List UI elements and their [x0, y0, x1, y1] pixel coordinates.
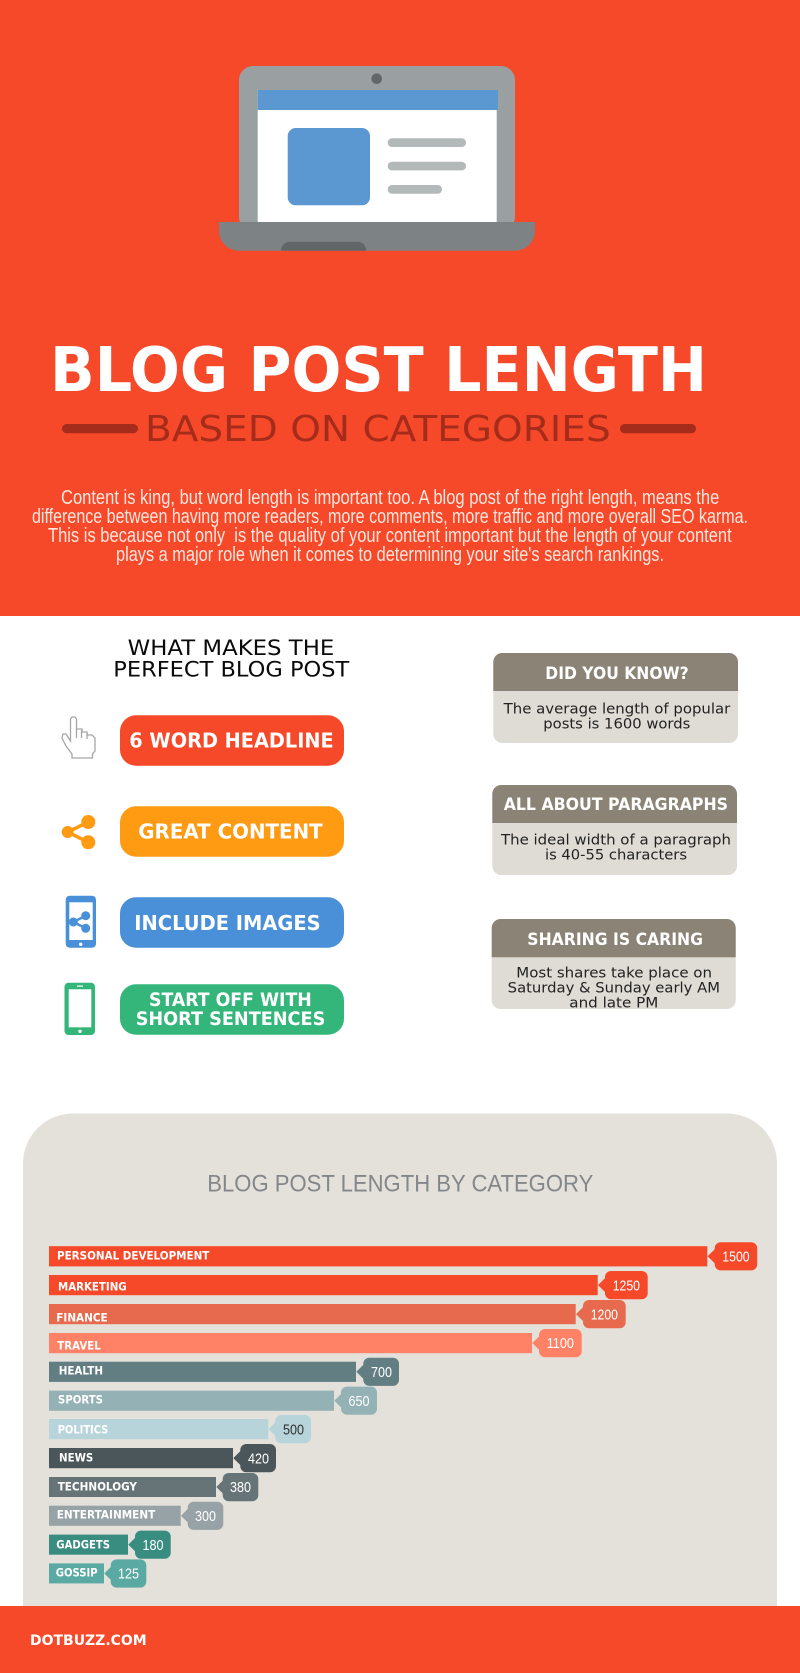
card: all about paragraphs: The ideal width of a paragraph	[500, 831, 731, 848]
intro paragraph	[32, 487, 748, 566]
bar: gadgets 180: GADGETS	[56, 1538, 110, 1552]
bar: personal development 1500: PERSONAL DEVELOPMENT	[57, 1249, 209, 1263]
button: include images: INCLUDE IMAGES	[134, 911, 321, 935]
panel: header background	[0, 0, 800, 616]
icon: laptop	[219, 66, 535, 251]
card: all about paragraphs: is 40-55 characters	[545, 846, 687, 863]
button: start off with short sentences: SHORT SENTENCES	[136, 1009, 325, 1030]
button: great content: GREAT CONTENT	[138, 820, 323, 844]
bar: politics 500: POLITICS	[58, 1422, 108, 1436]
card: sharing is caring: Most shares take place on	[516, 964, 712, 981]
button: great content	[120, 806, 344, 857]
bar: travel 1100	[49, 1329, 582, 1357]
bar: gossip 125: 125	[118, 1566, 139, 1583]
bar: personal development 1500	[49, 1242, 757, 1270]
bar: news 420: 420	[248, 1450, 269, 1467]
bar: gossip 125: GOSSIP	[56, 1566, 98, 1580]
bar: sports 650	[49, 1387, 377, 1415]
bar: entertainment 300: 300	[195, 1508, 216, 1525]
card: all about paragraphs: ALL ABOUT PARAGRAPHS	[504, 795, 728, 815]
chart title: BLOG POST LENGTH BY CATEGORY	[207, 1170, 593, 1197]
button: start off with short sentences: START OFF WITH	[149, 990, 312, 1011]
bar: marketing 1250: MARKETING	[58, 1279, 127, 1293]
bar: marketing 1250	[49, 1271, 648, 1299]
icon: phone with share	[66, 896, 96, 948]
card: sharing is caring: Saturday & Sunday early AM	[508, 979, 720, 996]
panel: chart background	[23, 1114, 777, 1606]
bar: sports 650: SPORTS	[58, 1392, 103, 1406]
bar: health 700: 700	[371, 1364, 392, 1381]
bar: news 420: NEWS	[59, 1450, 93, 1464]
card: sharing is caring: SHARING IS CARING	[527, 930, 703, 950]
panel: footer	[0, 1606, 800, 1673]
icon: share	[62, 815, 95, 849]
title: BLOG POST LENGTH	[50, 334, 707, 406]
button: 6 word headline	[120, 715, 344, 766]
bar: finance 1200	[49, 1300, 626, 1328]
heading: what makes the perfect blog post: PERFECT BLOG POST	[113, 658, 350, 683]
card: did you know: The average length of popular	[503, 700, 730, 717]
bar: politics 500	[49, 1415, 311, 1443]
footer brand: DOTBUZZ.COM	[30, 1632, 147, 1649]
card: did you know: posts is 1600 words	[543, 715, 690, 732]
icon: phone	[64, 983, 95, 1035]
subtitle with rules	[62, 409, 696, 450]
bar: travel 1100: 1100	[547, 1335, 574, 1352]
bar: gadgets 180	[49, 1531, 171, 1559]
bar: politics 500: 500	[283, 1421, 304, 1438]
bar: travel 1100: TRAVEL	[57, 1339, 101, 1353]
card: all about paragraphs	[492, 785, 737, 875]
bar: news 420	[49, 1444, 276, 1472]
card: did you know	[493, 653, 738, 743]
bar: gadgets 180: 180	[142, 1537, 164, 1554]
card: did you know: DID YOU KNOW?	[545, 664, 689, 684]
bar: personal development 1500: 1500	[722, 1248, 750, 1266]
bar: sports 650: 650	[348, 1393, 370, 1410]
card: sharing is caring: and late PM	[569, 994, 658, 1011]
bar: technology 380	[49, 1473, 258, 1501]
bar: gossip 125	[49, 1559, 146, 1588]
subtitle with rules: BASED ON CATEGORIES	[145, 409, 611, 450]
bar: finance 1200: FINANCE	[56, 1310, 108, 1324]
bar: marketing 1250: 1250	[613, 1277, 640, 1294]
bar: technology 380: 380	[230, 1479, 251, 1496]
button: start off with short sentences	[120, 984, 344, 1035]
button: 6 word headline: 6 WORD HEADLINE	[129, 729, 334, 753]
heading: what makes the perfect blog post: WHAT MAKES THE	[128, 636, 334, 661]
icon: pointing hand	[62, 717, 95, 758]
bar: finance 1200: 1200	[591, 1306, 618, 1323]
heading: what makes the perfect blog post	[113, 636, 350, 683]
bar: entertainment 300: ENTERTAINMENT	[57, 1508, 155, 1522]
bar: health 700	[49, 1358, 399, 1386]
button: include images	[120, 897, 344, 948]
intro paragraph: plays a major role when it comes to determining your site's search rankings.	[116, 544, 664, 566]
bar: health 700: HEALTH	[59, 1364, 103, 1378]
bar: entertainment 300	[49, 1502, 223, 1530]
bar: technology 380: TECHNOLOGY	[58, 1479, 137, 1493]
card: sharing is caring	[492, 919, 736, 1011]
bar chart	[49, 1242, 757, 1588]
